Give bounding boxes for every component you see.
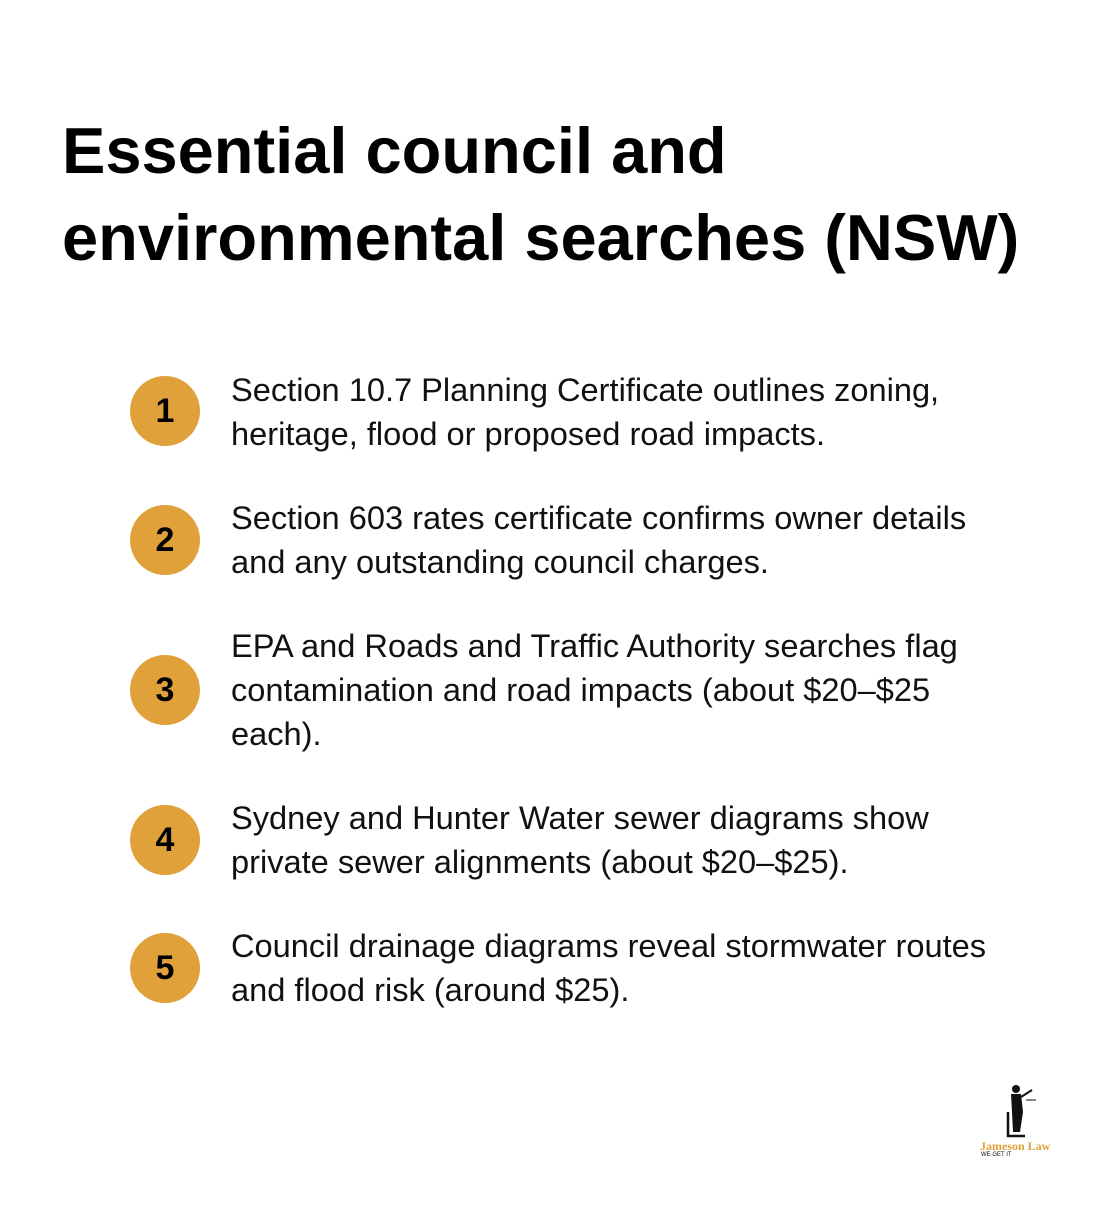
badge 3: 3 (156, 671, 174, 709)
text 3 (231, 627, 958, 752)
text 3: EPA and Roads and Traffic Authority searches flag (231, 627, 958, 664)
text 3: contamination and road impacts (about $20–$25 (231, 671, 930, 708)
icon: justice figure (1006, 1085, 1036, 1138)
text 4: Sydney and Hunter Water sewer diagrams show (231, 799, 929, 836)
logo text: Jameson Law (980, 1139, 1050, 1153)
badge 1: 1 (156, 392, 174, 430)
badge 4: 4 (156, 821, 174, 859)
title: Essential council and (62, 114, 727, 187)
item 2 (130, 499, 966, 580)
text 4: private sewer alignments (about $20–$25). (231, 843, 849, 880)
logo: WE GET IT (981, 1152, 1012, 1158)
logo (980, 1085, 1050, 1158)
text 5 (231, 927, 986, 1008)
text 2: Section 603 rates certificate confirms owner details (231, 499, 966, 536)
badge 5: 5 (156, 949, 174, 987)
badge 4 (130, 805, 200, 875)
badge 2 (130, 505, 200, 575)
text 1: heritage, flood or proposed road impacts. (231, 415, 825, 452)
item 5 (130, 927, 986, 1008)
text 1: Section 10.7 Planning Certificate outlines zoning, (231, 371, 939, 408)
badge 2: 2 (156, 521, 174, 559)
title: environmental searches (NSW) (62, 201, 1019, 274)
badge 1 (130, 376, 200, 446)
item 4 (130, 799, 929, 880)
text 4 (231, 799, 929, 880)
item 1 (130, 371, 939, 452)
title (62, 114, 1019, 274)
text 5: and flood risk (around $25). (231, 971, 629, 1008)
text 2: and any outstanding council charges. (231, 543, 769, 580)
badge 3 (130, 655, 200, 725)
text 2 (231, 499, 966, 580)
text 5: Council drainage diagrams reveal stormwater routes (231, 927, 986, 964)
text 3: each). (231, 715, 322, 752)
text 1 (231, 371, 939, 452)
item 3 (130, 627, 958, 752)
badge 5 (130, 933, 200, 1003)
